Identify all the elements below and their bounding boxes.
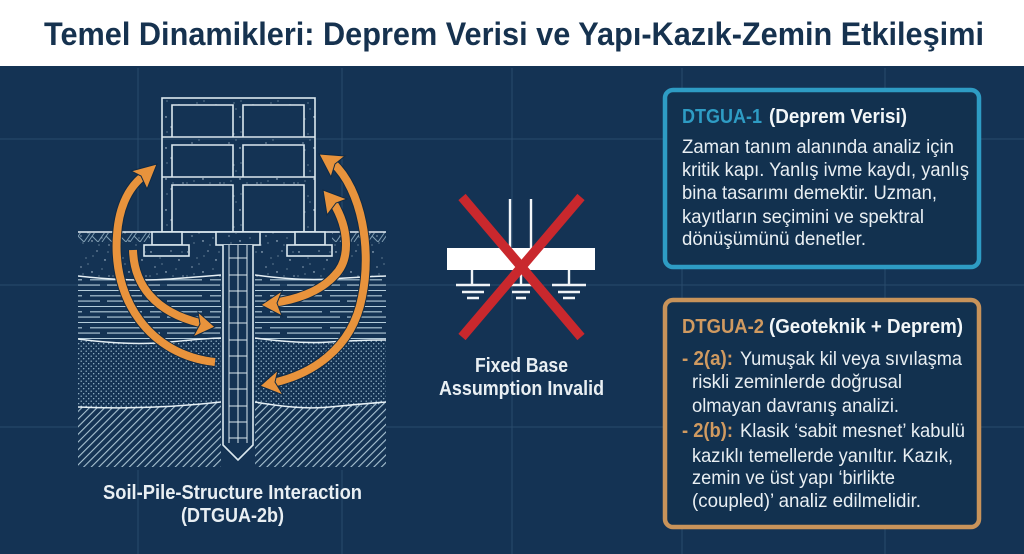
panel heading: DTGUA-2: DTGUA-2 [682,316,764,338]
item: 2(b) [682,420,965,512]
footings and pile cap [144,232,332,256]
soil layers [78,232,386,467]
diagram caption: (DTGUA-2b) [181,505,284,527]
panel: DTGUA-1 [665,90,979,267]
panel heading: DTGUA-1: DTGUA-1 [682,106,762,128]
icon caption: Fixed Base [475,355,568,377]
panel body: DTGUA-1: dönüşümünü denetler. [682,228,866,250]
panel: DTGUA-2 [665,300,979,527]
panel body: DTGUA-1 [682,136,969,250]
panel body: DTGUA-1: Zaman tanım alanında analiz için [682,136,954,158]
panel heading: DTGUA-1 [682,106,907,128]
item: 2(a) [682,348,962,417]
item: 2(a): riskli zeminlerde doğrusal [692,371,902,393]
item: 2(b): Klasik ‘sabit mesnet’ kabulü [740,420,965,442]
icon caption: Assumption Invalid [439,378,604,400]
item: 2(b): zemin ve üst yapı ‘birlikte [692,467,895,489]
ground surface line [78,231,386,233]
panel heading: DTGUA-1: (Deprem Verisi) [769,106,907,128]
arrow: right outer [260,154,366,395]
panel body: DTGUA-1: kayıtların seçimini ve spektral [682,206,924,228]
arrow: left inner [133,250,215,337]
title: Temel Dinamikleri: Deprem Verisi ve Yapı-Kazık-Zemin Etkileşimi [44,16,984,52]
item: 2(a): Yumuşak kil veya sıvılaşma [740,348,962,370]
diagram caption [103,482,362,527]
item: 2(b): kazıklı temellerde yanıltır. Kazık, [692,445,953,467]
item: 2(b): (coupled)’ analiz edilmelidir. [692,490,921,512]
diagram caption: Soil-Pile-Structure Interaction [103,482,362,504]
panel heading: DTGUA-2 [682,316,963,338]
panel heading: DTGUA-2: (Geoteknik + Deprem) [769,316,963,338]
item: 2(b): - 2(b): [682,420,733,442]
icon caption [439,355,604,400]
panel body: DTGUA-1: bina tasarımı demektir. Uzman, [682,182,937,204]
item: 2(a): olmayan davranış analizi. [692,395,899,417]
arrow: left outer [117,164,215,362]
icon: crossed-out fixed base [447,197,595,337]
header band [0,0,1024,66]
panel body: DTGUA-1: kritik kapı. Yanlış ivme kaydı, yanlış [682,159,969,181]
building frame [162,98,315,232]
pile with reinforcement cage [223,245,253,460]
diagram: soil-pile-structure interaction [78,98,386,467]
item: 2(a): - 2(a): [682,348,733,370]
arrow: right inner [261,190,347,316]
